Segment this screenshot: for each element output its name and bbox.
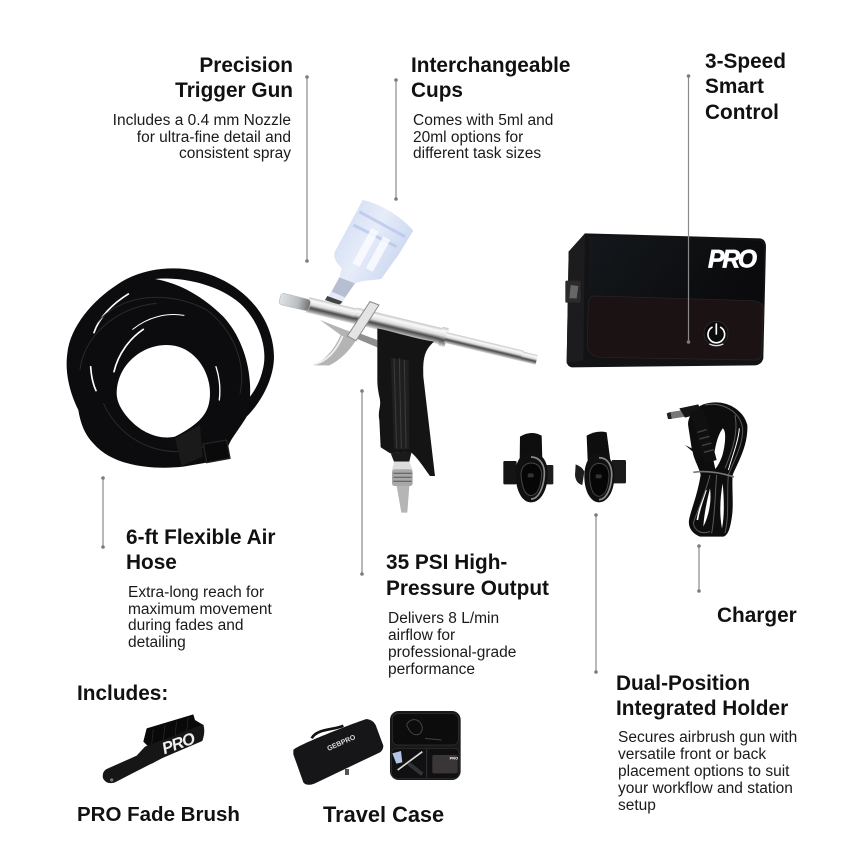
text: holder description: setup: [618, 797, 656, 814]
icon: airbrush gun: [278, 200, 539, 513]
heading: 3-Speed Smart Control: 3-Speed: [705, 50, 786, 73]
text: trigger gun description: consistent spray: [179, 145, 291, 162]
text: hose description: detailing: [128, 634, 186, 651]
power button: [704, 321, 728, 346]
heading: 3-Speed Smart Control: Control: [705, 101, 779, 124]
gun lever: [313, 320, 377, 365]
text: hose description: during fades and: [128, 617, 243, 634]
gun connector: [391, 452, 413, 513]
heading: 6-ft Flexible Air Hose: Hose: [126, 551, 177, 574]
compressor front panel: [588, 236, 764, 303]
text: hose description: maximum movement: [128, 601, 273, 618]
case interior: [390, 711, 461, 780]
label: Travel Case: Travel Case: [323, 802, 444, 827]
text: pressure description: Delivers 8 L/min: [388, 610, 499, 627]
text: trigger gun description: for ultra-fine detail and: [137, 129, 291, 146]
icon: coiled air hose: [67, 268, 274, 468]
label: PRO Fade Brush: PRO Fade Brush: [77, 803, 240, 826]
text: cups description: different task sizes: [413, 145, 541, 162]
text: cups description: 20ml options for: [413, 129, 523, 146]
heading: 35 PSI High-Pressure Output: 35 PSI High-: [386, 551, 507, 574]
icon: travel case: [293, 711, 461, 785]
text: holder description: your workflow and station: [618, 780, 793, 797]
heading: Dual-Position Integrated Holder: Dual-Position: [616, 672, 750, 695]
icon: compressor: [565, 233, 766, 367]
icon: fade brush: PRO: [159, 729, 198, 758]
text: hose description: Extra-long reach for: [128, 584, 264, 601]
text: holder description: placement options to suit: [618, 763, 790, 780]
icon: right holder: [575, 432, 626, 502]
heading: Dual-Position Integrated Holder: Integrated Holder: [616, 697, 788, 720]
leader line: pressure: [360, 389, 364, 576]
leader line: cups: [394, 78, 398, 201]
text: pressure description: professional-grade: [388, 644, 516, 661]
heading: Includes: Includes:: [77, 682, 168, 705]
leader line: trigger gun: [305, 75, 309, 263]
heading: Precision Trigger Gun: Precision: [199, 54, 293, 77]
text: pressure description: performance: [388, 661, 475, 678]
heading: 35 PSI High-Pressure Output: Pressure Output: [386, 577, 549, 600]
text: trigger gun description: Includes a 0.4 mm Nozzle: [113, 112, 291, 129]
gun trigger: [347, 302, 379, 341]
leader line: holder: [594, 513, 598, 674]
heading: Interchangeable Cups: Interchangeable: [411, 54, 570, 77]
icon: left holder: [503, 433, 553, 502]
heading: 3-Speed Smart Control: Smart: [705, 75, 764, 98]
heading: Precision Trigger Gun: Trigger Gun: [175, 79, 293, 102]
icon: travel case: GEBPRO: [326, 734, 357, 753]
gun barrel: [278, 288, 539, 369]
gun cup: [325, 200, 413, 305]
leader line: hose: [101, 476, 105, 549]
heading: 6-ft Flexible Air Hose: 6-ft Flexible Air: [126, 526, 275, 549]
gun handle: [377, 328, 435, 476]
text: cups description: Comes with 5ml and: [413, 112, 553, 129]
icon: charger cable: [667, 402, 747, 537]
leader line: speed control: [687, 74, 690, 344]
case interior: PRO: [450, 755, 458, 760]
leader line: charger: [697, 544, 701, 593]
text: pressure description: airflow for: [388, 627, 455, 644]
text: holder description: Secures airbrush gun with: [618, 729, 797, 746]
icon: fade brush: [103, 714, 204, 783]
heading: Charger: Charger: [717, 604, 797, 627]
compressor logo: PRO: [708, 247, 757, 274]
heading: Interchangeable Cups: Cups: [411, 79, 463, 102]
text: holder description: versatile front or back: [618, 746, 766, 763]
